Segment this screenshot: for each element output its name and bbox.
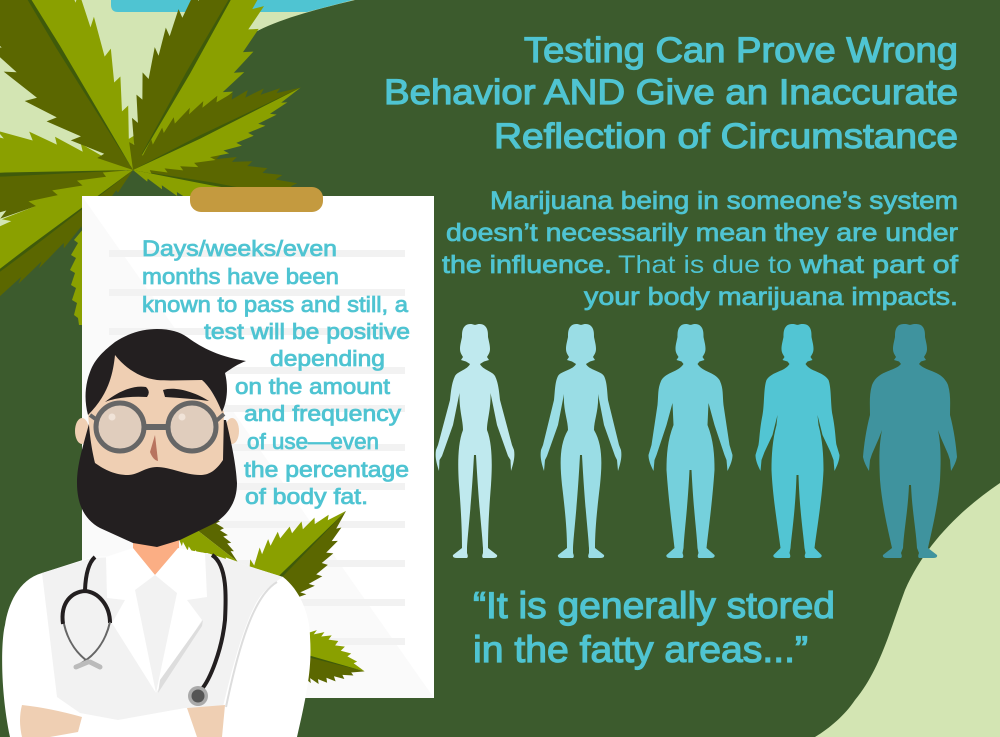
coat arm crease <box>226 582 277 707</box>
neck <box>133 535 179 575</box>
title: Behavior AND Give an Inaccurate <box>384 73 958 112</box>
intro text block: the influence. <box>442 251 612 279</box>
coat vest <box>42 553 283 720</box>
paper text: known to pass and still, a <box>142 292 409 317</box>
small leaves on paper <box>151 486 372 696</box>
quote: “It is generally stored <box>473 585 835 626</box>
quote <box>473 585 835 670</box>
right hand <box>187 705 225 737</box>
right collar and lapel <box>155 548 207 693</box>
paper text: and frequency <box>244 401 401 426</box>
paper text: on the amount <box>235 374 390 399</box>
teal tab top <box>111 0 197 12</box>
body silhouette 5 <box>863 324 957 558</box>
face <box>88 353 224 475</box>
ears <box>75 418 239 444</box>
paper text: depending <box>270 346 385 371</box>
nose <box>150 435 158 461</box>
title: Reflection of Circumstance <box>494 117 958 156</box>
teal band top <box>243 0 353 12</box>
paper text: of body fat. <box>245 484 368 509</box>
body silhouette 1 <box>436 324 514 558</box>
left collar and lapel <box>106 548 156 693</box>
paper text: Days/weeks/even <box>142 236 337 261</box>
paper text: months have been <box>142 264 339 289</box>
paper text: test will be positive <box>204 319 410 344</box>
body silhouette 3 <box>648 324 732 558</box>
light green curve bottom right <box>815 483 1000 737</box>
paper text <box>142 236 410 509</box>
lapel shadow <box>158 620 203 693</box>
left hand <box>20 705 82 737</box>
paper text: of use—even <box>247 429 379 454</box>
large cannabis leaf <box>0 0 335 380</box>
body silhouette 4 <box>756 324 840 558</box>
doctor <box>2 329 310 737</box>
hair <box>86 329 246 415</box>
intro text block: what part of <box>799 251 958 279</box>
glasses <box>90 403 224 451</box>
clipboard clip <box>190 187 323 212</box>
stethoscope <box>63 555 226 706</box>
eyebrows <box>105 387 209 402</box>
title <box>384 31 958 156</box>
intro text block: Marijuana being in someone’s system <box>490 187 958 215</box>
doctor coat <box>2 553 310 737</box>
intro text block: That is due to <box>618 251 792 279</box>
clipboard paper <box>82 196 434 698</box>
paper text: the percentage <box>244 457 409 482</box>
beard <box>77 420 237 547</box>
title: Testing Can Prove Wrong <box>524 31 958 70</box>
quote: in the fatty areas...” <box>473 629 808 670</box>
body silhouette 2 <box>541 324 621 558</box>
intro text block: doesn’t necessarily mean they are under <box>446 219 958 247</box>
intro text block: your body marijuana impacts. <box>584 283 958 311</box>
intro text block <box>442 187 958 311</box>
light green corner shape top left <box>0 0 355 262</box>
